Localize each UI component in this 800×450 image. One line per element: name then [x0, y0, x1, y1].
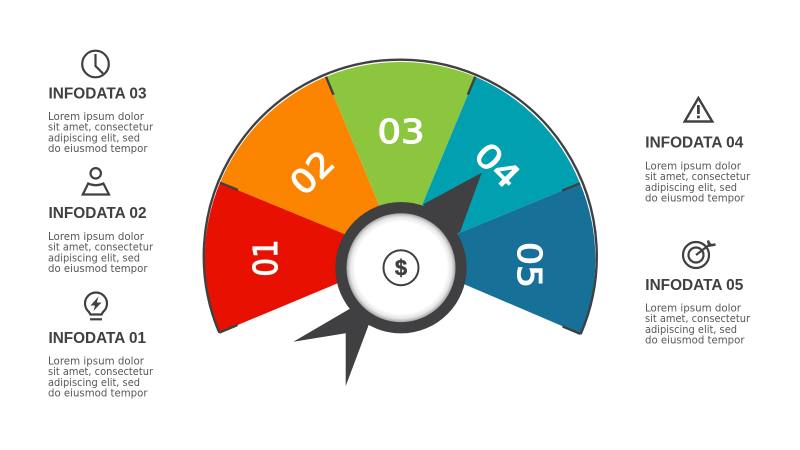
- icon: target: [683, 240, 716, 268]
- icon: dollar coin: [384, 250, 418, 285]
- body text 04: Lorem ipsum dolor: [645, 160, 742, 172]
- number 05: 05: [510, 242, 549, 288]
- body text 01: Lorem ipsum dolor: [48, 356, 145, 368]
- icon: clock: [82, 51, 109, 77]
- needle lower left: [293, 300, 375, 386]
- body text 03: [48, 111, 154, 155]
- body text 01: [48, 356, 154, 400]
- body text 01: do eiusmod tempor: [48, 388, 148, 400]
- segment 01 red: [205, 183, 400, 333]
- panel: infodata 01: [48, 293, 154, 400]
- heading 04: INFODATA 04: [645, 135, 744, 152]
- body text 04: adipiscing elit, sed: [645, 182, 737, 194]
- body text 04: do eiusmod tempor: [645, 192, 745, 204]
- hub ring: [335, 202, 467, 333]
- segment 02 orange: [220, 77, 400, 257]
- body text 01: adipiscing elit, sed: [48, 377, 140, 389]
- needle upper right: [423, 173, 482, 240]
- body text 02: sit amet, consectetur: [48, 242, 154, 254]
- body text 05: Lorem ipsum dolor: [645, 302, 742, 314]
- outer arc: [204, 60, 597, 334]
- icon: dollar coin: $: [395, 256, 407, 281]
- number 04: 04: [467, 135, 528, 196]
- body text 01: sit amet, consectetur: [48, 366, 154, 378]
- heading 01: INFODATA 01: [48, 330, 146, 347]
- gauge chart: [204, 60, 597, 386]
- segment 04 teal: [400, 77, 580, 257]
- body text 02: do eiusmod tempor: [48, 263, 148, 275]
- body text 02: adipiscing elit, sed: [48, 252, 140, 264]
- body text 02: Lorem ipsum dolor: [48, 231, 145, 243]
- body text 04: [645, 160, 751, 204]
- icon: person on map: [83, 168, 109, 194]
- heading 03: INFODATA 03: [48, 86, 147, 102]
- body text 05: adipiscing elit, sed: [645, 324, 737, 336]
- body text 03: sit amet, consectetur: [48, 122, 154, 134]
- heading 05: INFODATA 05: [645, 277, 744, 294]
- panel: infodata 05: [645, 240, 751, 346]
- icon: power bulb: [85, 293, 107, 319]
- icon: warning triangle: [685, 98, 712, 122]
- heading 02: INFODATA 02: [48, 205, 146, 222]
- body text 04: sit amet, consectetur: [645, 171, 751, 183]
- number 02: 02: [282, 143, 342, 203]
- number 03: 03: [378, 112, 424, 151]
- panel: infodata 02: [48, 168, 154, 275]
- panel: infodata 03: [48, 51, 154, 155]
- tick marks: [219, 77, 581, 334]
- body text 03: Lorem ipsum dolor: [48, 111, 145, 123]
- body text 03: adipiscing elit, sed: [48, 132, 140, 144]
- body text 03: do eiusmod tempor: [48, 143, 148, 155]
- segment 05 blue: [400, 183, 595, 334]
- body text 05: sit amet, consectetur: [645, 313, 751, 325]
- segment 03 green: [326, 62, 475, 257]
- body text 02: [48, 231, 154, 275]
- hub centre: [346, 213, 456, 322]
- body text 05: do eiusmod tempor: [645, 334, 745, 346]
- panel: infodata 04: [645, 98, 751, 204]
- number 01: 01: [246, 240, 285, 276]
- body text 05: [645, 302, 751, 346]
